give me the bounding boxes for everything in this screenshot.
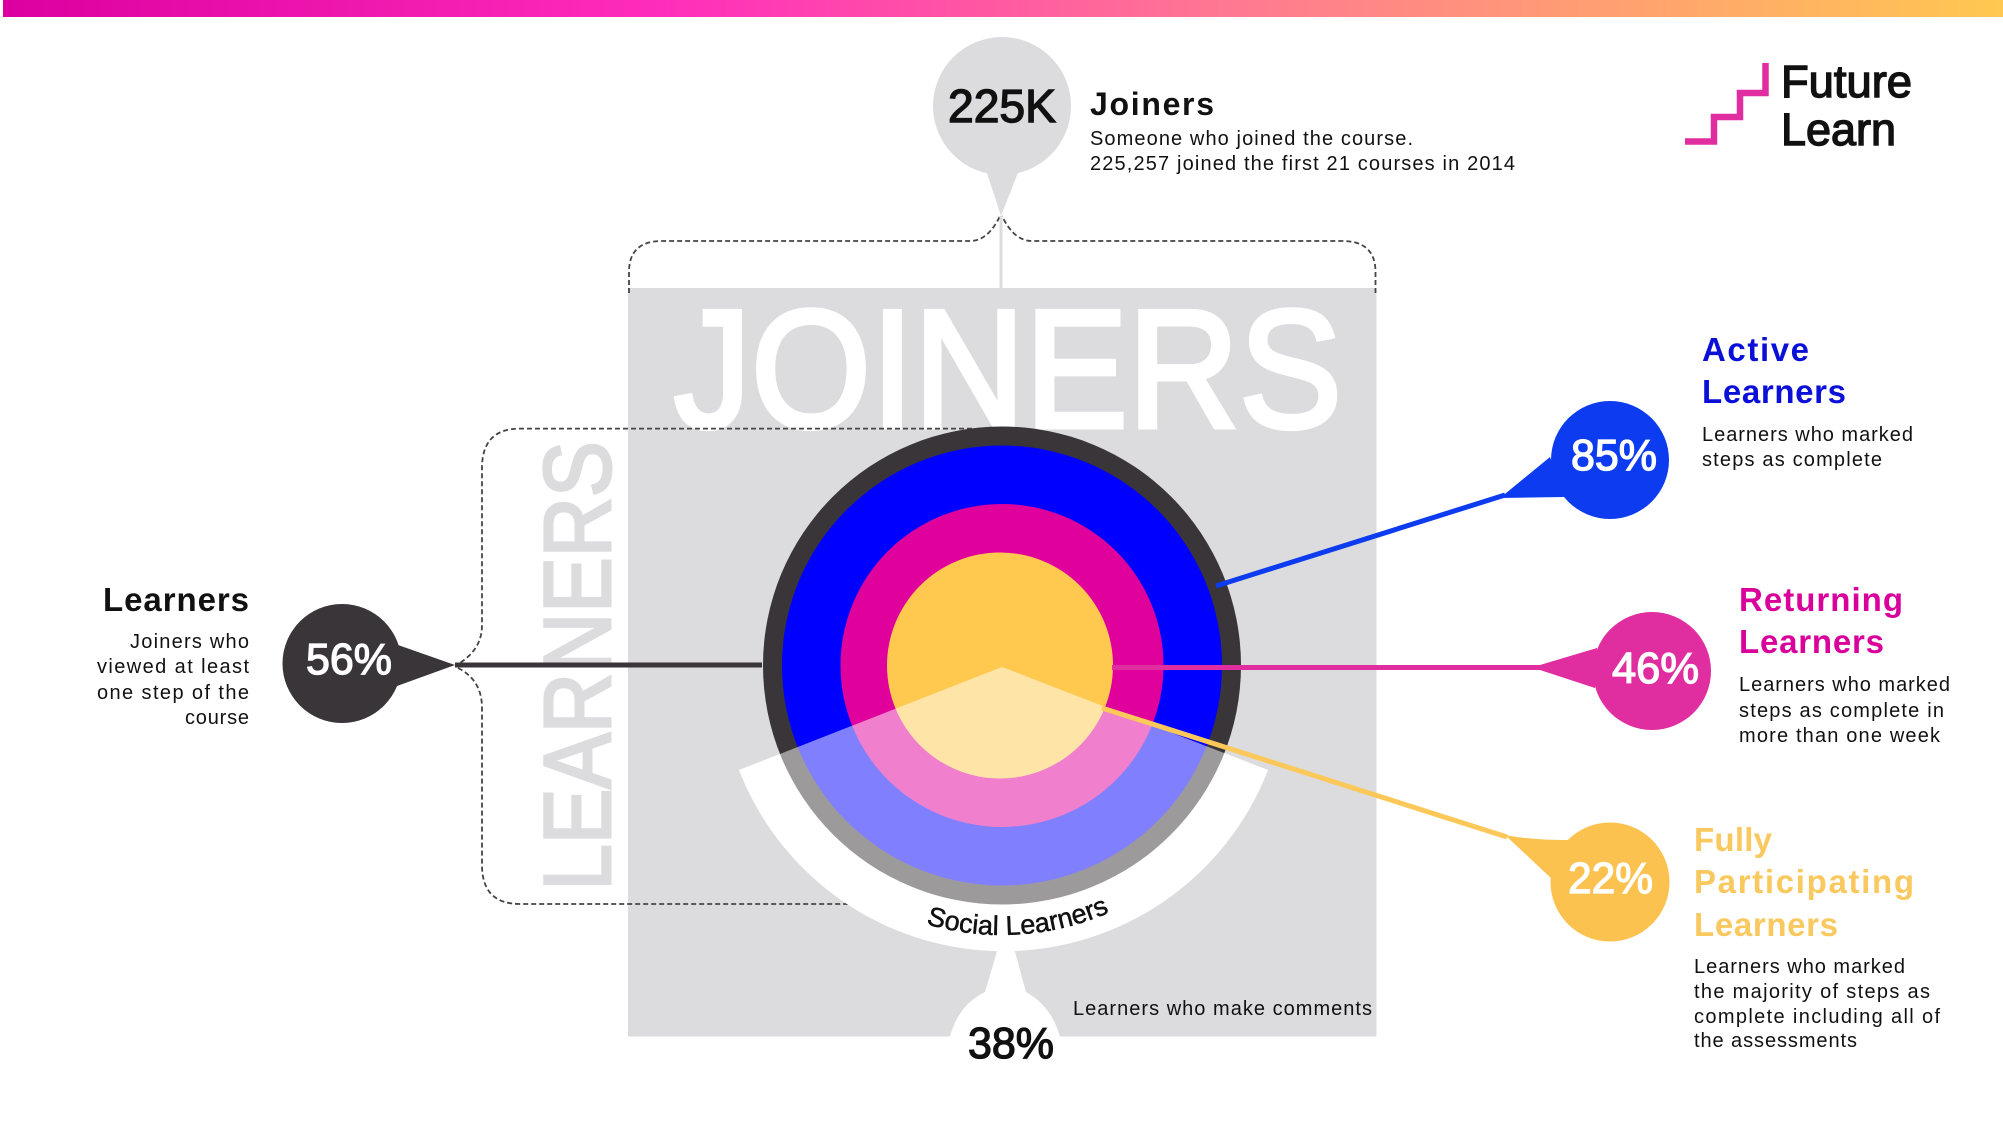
bracket: learners dashed outline <box>458 429 972 904</box>
logo: FutureLearn <box>1685 56 1912 155</box>
callout: active learners 85%: 85% <box>1571 431 1657 480</box>
text block: returning learners: Learners who marked <box>1739 674 1950 696</box>
callout: joiners 225K <box>933 37 1071 216</box>
callout: joiners 225K: 225K <box>948 80 1056 132</box>
top gradient bar <box>3 0 2003 17</box>
text block: joiners: Someone who joined the course. <box>1090 128 1413 150</box>
arc label: Social Learners: Social Learners <box>928 900 1108 936</box>
text block: active learners: Learners <box>1702 373 1846 410</box>
concentric learner circles <box>763 426 1241 904</box>
social learners translucent overlay <box>739 667 1268 951</box>
connector: joiners stem <box>1000 216 1002 301</box>
text block: joiners: Joiners <box>1090 86 1214 122</box>
text block: active learners <box>1702 331 1913 471</box>
text block: learners: Learners <box>103 581 249 618</box>
text block: learners: viewed at least <box>97 656 249 678</box>
text block: fully participating learners <box>1694 821 1940 1052</box>
text block: fully participating learners: Fully <box>1694 821 1773 858</box>
text block: learners <box>97 581 249 729</box>
text block: active learners: Active <box>1702 331 1809 368</box>
text block: learners: Joiners who <box>130 631 249 653</box>
callout: fully participating learners 22% <box>1102 708 1670 942</box>
text block: fully participating learners: the majority of steps as <box>1694 981 1930 1003</box>
callout: fully participating learners 22%: 22% <box>1568 854 1653 903</box>
text block: returning learners: steps as complete in <box>1739 700 1944 722</box>
heading: LEARNERS vertical watermark: LEARNERS <box>525 442 631 890</box>
callout: learners 56% <box>282 604 762 723</box>
social learners white sector <box>739 667 1268 951</box>
text block: active learners: steps as complete <box>1702 449 1882 471</box>
text block: fully participating learners: complete including all of <box>1694 1006 1940 1028</box>
callout: social learners 38% <box>947 948 1063 1111</box>
text block: returning learners <box>1739 581 1950 747</box>
text block: active learners: Learners who marked <box>1702 424 1913 446</box>
text block: fully participating learners: Learners who marked <box>1694 956 1905 978</box>
heading: JOINERS watermark: JOINERS <box>674 275 1342 463</box>
text block: joiners: 225,257 joined the first 21 courses in 2014 <box>1090 153 1515 175</box>
logo: FutureLearn: Learn <box>1781 104 1896 155</box>
text block: fully participating learners: the assessments <box>1694 1030 1857 1052</box>
text block: returning learners: more than one week <box>1739 725 1941 747</box>
callout: returning learners 46%: 46% <box>1612 644 1699 693</box>
text block: fully participating learners: Participating <box>1694 863 1914 900</box>
text block: learners: course <box>185 707 249 729</box>
text block: learners: one step of the <box>97 682 249 704</box>
text block: returning learners: Learners <box>1739 623 1884 660</box>
callout: social learners 38%: 38% <box>968 1019 1054 1068</box>
text block: fully participating learners: Learners <box>1694 906 1838 943</box>
text: social learners description: Learners who make comments <box>1073 998 1372 1020</box>
text block: returning learners: Returning <box>1739 581 1903 618</box>
bracket: joiners dashed outline <box>629 216 1376 293</box>
panel: joiners square <box>628 275 1376 1036</box>
callout: returning learners 46% <box>1112 612 1711 730</box>
callout: learners 56%: 56% <box>306 635 392 684</box>
callout: active learners 85% <box>1216 401 1669 586</box>
logo: FutureLearn: Future <box>1781 56 1912 107</box>
text block: joiners <box>1090 86 1515 175</box>
